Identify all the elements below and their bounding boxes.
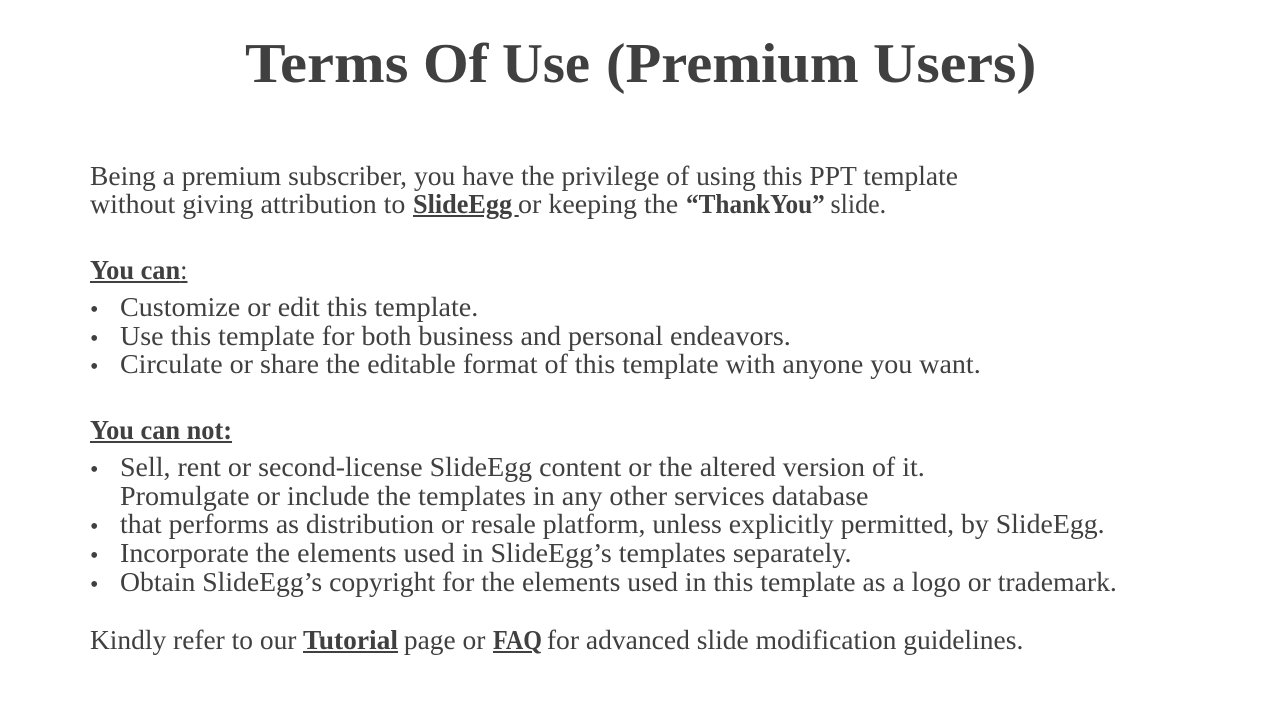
list: you can not: • — [90, 543, 98, 569]
list: you can — [90, 292, 981, 380]
intro paragraph: slide. — [831, 189, 886, 219]
list: you can not: • — [90, 457, 98, 483]
list: you can: • — [90, 326, 98, 352]
intro paragraph: “ThankYou” — [686, 189, 825, 219]
list: you can not: • — [90, 572, 98, 598]
title: Use — [502, 33, 590, 95]
list: you can: • — [90, 354, 98, 380]
title: Of — [423, 33, 488, 95]
list: you can not: Incorporate the elements used in SlideEgg’s templates separately. — [120, 538, 851, 568]
intro paragraph: or keeping the — [518, 189, 678, 219]
intro paragraph — [90, 161, 958, 219]
list: you can not — [90, 452, 1117, 598]
list: you can: Use this template for both business and personal endeavors. — [120, 321, 791, 351]
title — [245, 33, 1036, 95]
closing note — [90, 625, 1023, 655]
intro paragraph: Being a premium subscriber, you have the privilege of using this PPT template — [90, 161, 958, 191]
closing note: FAQ — [493, 625, 542, 655]
closing note: for advanced slide modification guidelines. — [547, 625, 1023, 655]
list: you can not: • — [90, 514, 98, 540]
list: you can not: that performs as distribution or resale platform, unless explicitly permitted, by SlideEgg. — [120, 509, 1105, 539]
title: Users) — [873, 33, 1036, 95]
closing note: Kindly refer to our — [90, 625, 296, 655]
list: you can not: Sell, rent or second-license SlideEgg content or the altered version of it. — [120, 452, 925, 482]
intro paragraph: SlideEgg — [413, 189, 512, 219]
list: you can: • — [90, 297, 98, 323]
title: Terms — [245, 33, 408, 95]
heading: you can not: You can not: — [90, 415, 232, 445]
list: you can: Customize or edit this template. — [120, 292, 478, 322]
closing note: page or — [404, 625, 485, 655]
closing note: Tutorial — [303, 625, 398, 655]
list: you can: Circulate or share the editable format of this template with anyone you want. — [120, 349, 981, 379]
intro paragraph: without giving attribution to — [90, 189, 405, 219]
heading: you can: You can: — [90, 255, 188, 285]
title: (Premium — [606, 33, 859, 95]
list: you can not: Obtain SlideEgg’s copyright for the elements used in this template as a logo or trademark. — [120, 567, 1117, 597]
list: you can not: Promulgate or include the templates in any other services database — [120, 481, 868, 511]
